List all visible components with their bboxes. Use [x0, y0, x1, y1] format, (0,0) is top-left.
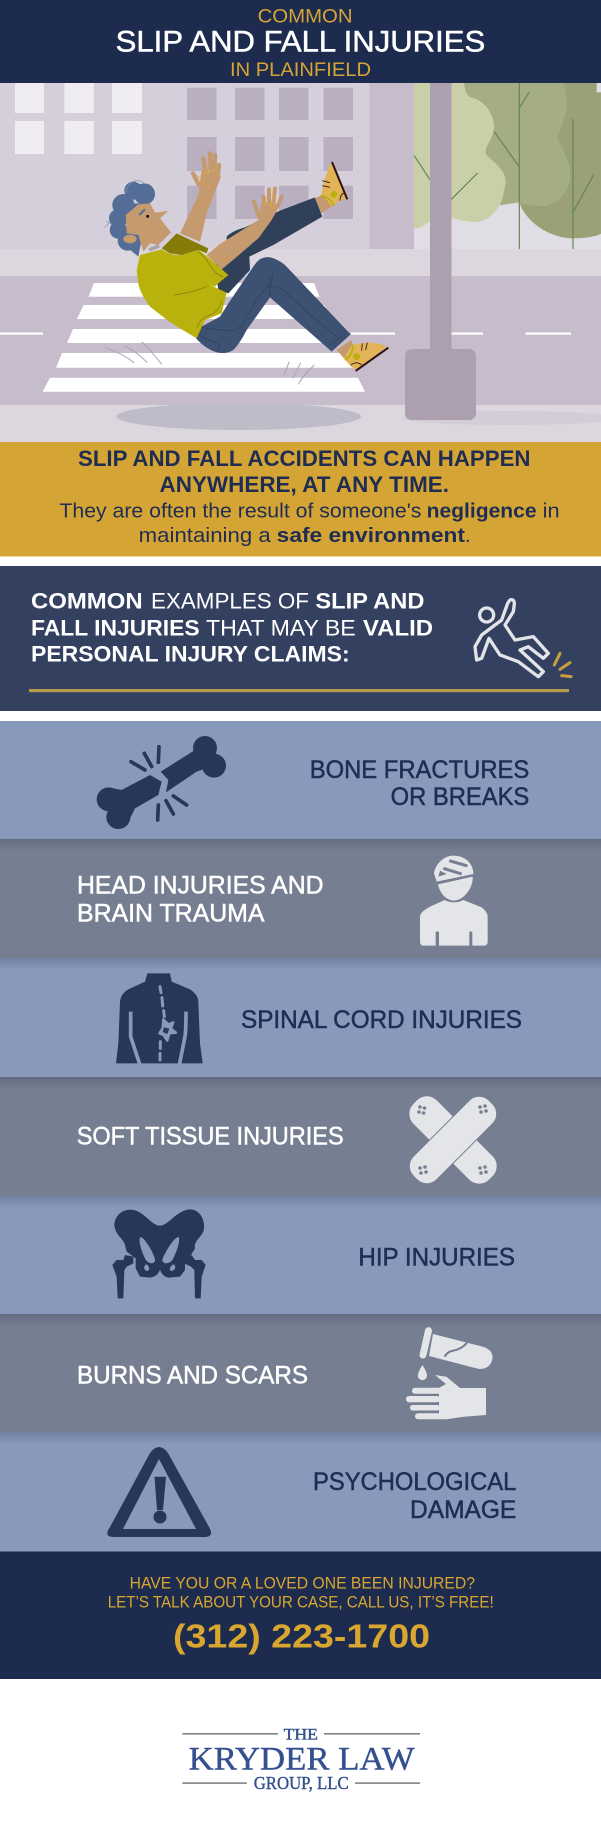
- panel: call to action: [0, 1552, 601, 1679]
- label: [77, 873, 324, 928]
- raised leg and torso: [213, 197, 322, 293]
- body line two: safe environment: [277, 524, 465, 547]
- body line two: maintaining a: [139, 524, 271, 547]
- road and pavement: [0, 249, 601, 442]
- label: BONE FRACTURES: [310, 757, 529, 784]
- background buildings: [0, 83, 601, 249]
- label: [310, 757, 529, 811]
- label: BRAIN TRAUMA: [77, 901, 265, 928]
- label: HEAD INJURIES AND: [77, 873, 324, 900]
- panel: soft tissue injuries: [0, 1077, 601, 1196]
- heading line two: ANYWHERE, AT ANY TIME.: [160, 472, 449, 497]
- icon: back with injured spine: [116, 973, 203, 1065]
- heading text: EXAMPLES OF: [151, 589, 309, 614]
- logo: the kryder law group: [182, 1727, 420, 1793]
- call to action text: LET’S TALK ABOUT YOUR CASE, CALL US, IT’S FREE!: [108, 1592, 494, 1611]
- heading: slip and fall injuries: SLIP AND FALL INJURIES: [116, 26, 485, 59]
- panel: head injuries: [0, 839, 601, 958]
- divider: [29, 689, 569, 692]
- body line one: in: [543, 499, 560, 522]
- logo: the kryder law group: KRYDER LAW: [189, 1741, 415, 1777]
- body line one: [59, 499, 560, 522]
- heading text: COMMON: [31, 589, 143, 614]
- label: SPINAL CORD INJURIES: [241, 1007, 522, 1034]
- trees: [414, 83, 601, 249]
- heading text: THAT MAY BE: [206, 616, 356, 641]
- icon: person slipping: [475, 600, 571, 677]
- call to action text: HAVE YOU OR A LOVED ONE BEEN INJURED?: [130, 1573, 475, 1592]
- heading text: PERSONAL INJURY CLAIMS:: [31, 642, 350, 667]
- panel: common examples heading: [0, 566, 601, 711]
- body line two: [139, 524, 471, 547]
- label: HIP INJURIES: [358, 1244, 515, 1271]
- crosswalk: [42, 283, 365, 392]
- heading text: FALL INJURIES: [31, 616, 200, 641]
- ground shadows: [116, 403, 601, 430]
- heading: in plainfield: IN PLAINFIELD: [230, 59, 371, 81]
- heading text: [31, 589, 433, 667]
- panel: bone fractures: [0, 721, 601, 839]
- lower foot and shoe: [337, 340, 388, 371]
- label: DAMAGE: [410, 1497, 516, 1524]
- heading: common: COMMON: [258, 6, 353, 28]
- label: OR BREAKS: [391, 784, 529, 811]
- body line one: They are often the result of someone's: [59, 499, 421, 522]
- falling man: [104, 153, 388, 371]
- heading text: VALID: [363, 616, 433, 641]
- icon: crossed bandages: [404, 1091, 502, 1189]
- head, hair and upper arm: [104, 153, 221, 257]
- label: SOFT TISSUE INJURIES: [77, 1123, 344, 1150]
- icon: chemical burn on hand: [406, 1331, 493, 1419]
- label: PSYCHOLOGICAL: [313, 1469, 516, 1496]
- logo: the kryder law group: GROUP, LLC: [254, 1773, 349, 1793]
- body line two: .: [465, 524, 471, 547]
- header: title block: [0, 0, 601, 83]
- panel: gold intro band: [0, 442, 601, 556]
- panel: burns and scars: [0, 1314, 601, 1432]
- shirt and front arm: [137, 188, 282, 338]
- raised foot and shoe: [315, 162, 347, 213]
- motion lines: [105, 342, 314, 384]
- call to action text: [108, 1573, 494, 1611]
- phone number: (312) 223-1700: [173, 1618, 430, 1655]
- panel: psychological damage: [0, 1432, 601, 1552]
- label: [313, 1469, 516, 1524]
- body line one: negligence: [427, 499, 537, 522]
- icon: warning triangle: [107, 1447, 211, 1537]
- logo: the kryder law group: THE: [284, 1727, 318, 1744]
- icon: broken bone: [97, 736, 226, 829]
- panel: spinal cord injuries: [0, 958, 601, 1077]
- heading line one: SLIP AND FALL ACCIDENTS CAN HAPPEN: [78, 446, 530, 471]
- label: BURNS AND SCARS: [77, 1363, 308, 1390]
- panel: hip injuries: [0, 1196, 601, 1314]
- front leg jeans: [196, 257, 351, 353]
- illustration: street scene with falling man: [0, 83, 601, 442]
- icon: bandaged head: [420, 856, 488, 946]
- street lamp post: [405, 83, 476, 420]
- icon: pelvis: [112, 1209, 206, 1298]
- heading text: SLIP AND: [315, 589, 424, 614]
